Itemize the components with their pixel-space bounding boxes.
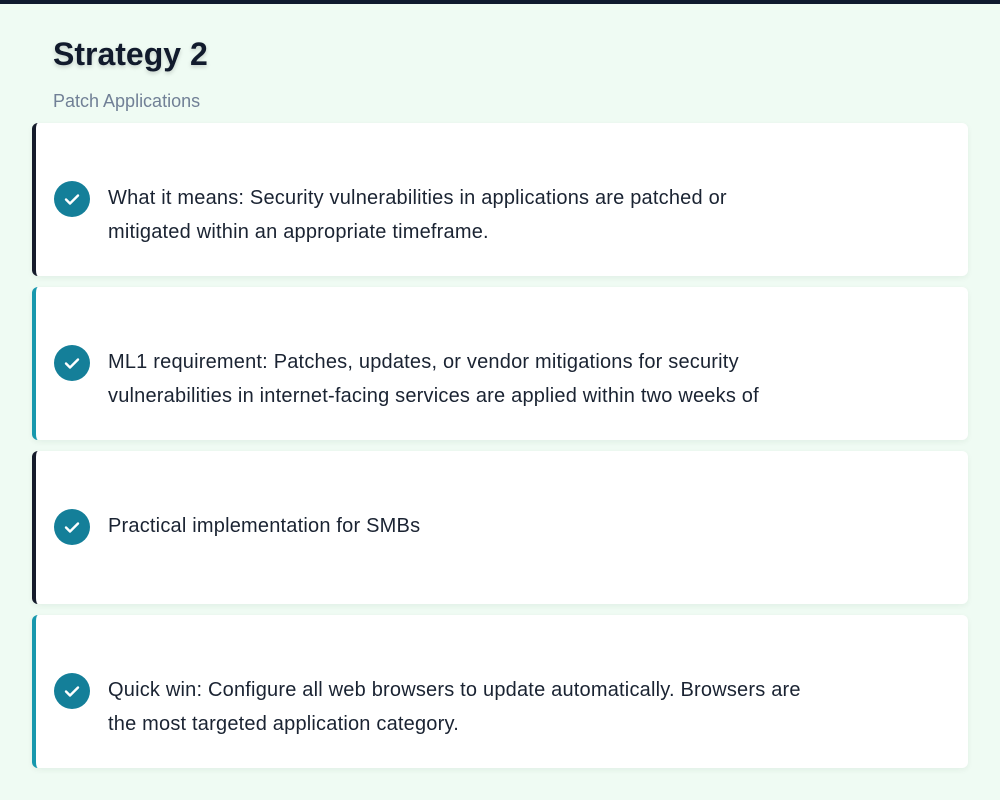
text [108, 679, 801, 735]
text: mitigated within an appropriate timeframe. [108, 221, 489, 243]
card: ML1 requirement [32, 287, 968, 440]
text: Quick win: Configure all web browsers to update automatically. Browsers are [108, 679, 801, 701]
text: ML1 requirement: Patches, updates, or vendor mitigations for security [108, 351, 739, 373]
icon: check [54, 181, 90, 217]
card: practical implementation [32, 451, 968, 604]
text: the most targeted application category. [108, 713, 459, 735]
subtitle: Patch Applications [53, 91, 200, 111]
text: vulnerabilities in internet-facing services are applied within two weeks of [108, 385, 759, 407]
title: Strategy 2 [53, 36, 208, 72]
icon: check [54, 673, 90, 709]
text: What it means: Security vulnerabilities in applications are patched or [108, 187, 727, 209]
text [108, 187, 727, 243]
text [108, 351, 759, 407]
icon: check [54, 345, 90, 381]
card: quick win [32, 615, 968, 768]
text: Practical implementation for SMBs [108, 515, 420, 537]
icon: check [54, 509, 90, 545]
card: what it means [32, 123, 968, 276]
